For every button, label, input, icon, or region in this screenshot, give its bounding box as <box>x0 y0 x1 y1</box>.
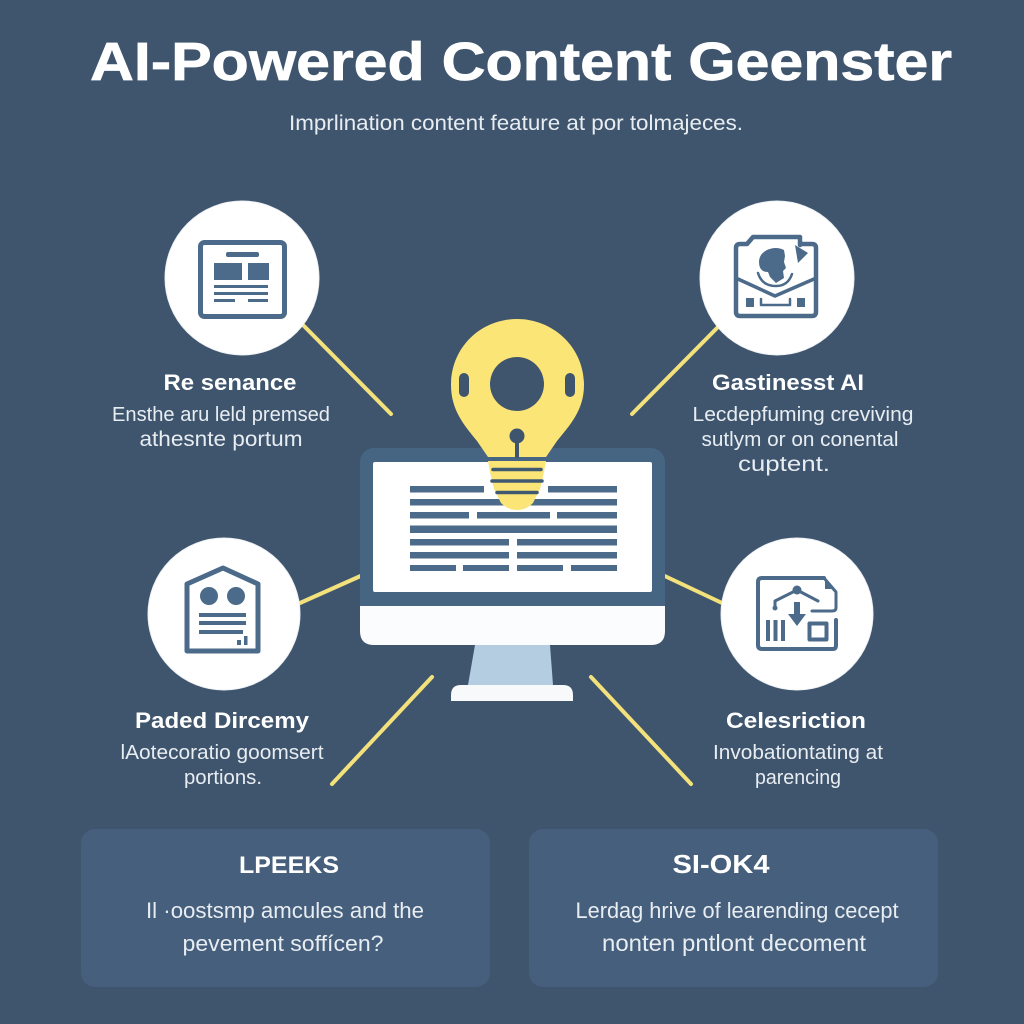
text: top left <box>112 404 330 451</box>
card text: nonten pntlont decoment <box>602 930 867 956</box>
central monitor <box>360 448 665 701</box>
bulb filament <box>510 428 524 458</box>
text: middle right: parencing <box>755 767 841 789</box>
icon: profile sheet <box>187 568 258 651</box>
icon: document layout <box>200 242 284 316</box>
icon circle <box>700 201 854 355</box>
card text: pevement soffícen? <box>182 931 384 956</box>
text: top right <box>692 404 914 476</box>
text: top right: Lecdepfuming creviving <box>692 404 914 426</box>
icon circle <box>165 201 319 355</box>
card text: Lerdag hrive of learending cecept <box>576 898 898 923</box>
panel: middle left feature <box>148 538 300 690</box>
text: middle right: Invobationtating at <box>713 742 883 764</box>
card background <box>529 829 938 987</box>
monitor stand <box>468 645 553 685</box>
card text: Il ·oostsmp amcules and the <box>146 898 424 923</box>
text: middle left: portions. <box>184 767 262 789</box>
lightbulb <box>451 319 584 510</box>
icon circle <box>721 538 873 690</box>
panel: middle right feature <box>721 538 873 690</box>
heading: middle right: Celesriction <box>726 708 866 733</box>
icon: portrait envelope <box>736 237 816 316</box>
panel: top left feature <box>165 201 319 355</box>
bulb side slots <box>459 373 575 397</box>
heading: top right: Gastinesst AI <box>712 370 864 395</box>
bulb centre hole <box>490 357 544 411</box>
screw thread lines <box>492 470 542 492</box>
icon: data workflow file <box>758 578 836 649</box>
subtitle: Imprlination content feature at por tolmajeces. <box>289 112 743 135</box>
bulb glass <box>451 319 584 457</box>
monitor screen <box>373 462 652 592</box>
text: top right: cuptent. <box>738 453 830 476</box>
bulb screw base <box>488 461 546 510</box>
heading: middle left: Paded Dircemy <box>135 708 310 733</box>
heading: top left: Re senance <box>164 370 296 395</box>
text: middle left <box>120 742 324 789</box>
monitor bezel <box>360 448 665 638</box>
monitor chin <box>360 606 665 645</box>
title: AI-Powered Content Geenster <box>90 32 952 92</box>
card text <box>146 898 424 956</box>
panel: bottom right card <box>529 829 938 987</box>
icon circle <box>148 538 300 690</box>
text: top left: athesnte portum <box>140 428 302 451</box>
card background <box>81 829 490 987</box>
text: middle left: lAotecoratio goomsert <box>120 742 324 764</box>
panel: bottom left card <box>81 829 490 987</box>
text: top left: Ensthe aru leld premsed <box>112 404 330 426</box>
card heading: SI-OK4 <box>672 849 770 879</box>
connector rays <box>300 325 722 784</box>
card heading: LPEEKS <box>239 852 339 879</box>
text: middle right <box>713 742 883 789</box>
card text <box>576 898 898 956</box>
screen text lines <box>410 486 617 571</box>
monitor base <box>451 685 573 701</box>
panel: top right feature <box>700 201 854 355</box>
text: top right: sutlym or on conental <box>702 429 898 451</box>
